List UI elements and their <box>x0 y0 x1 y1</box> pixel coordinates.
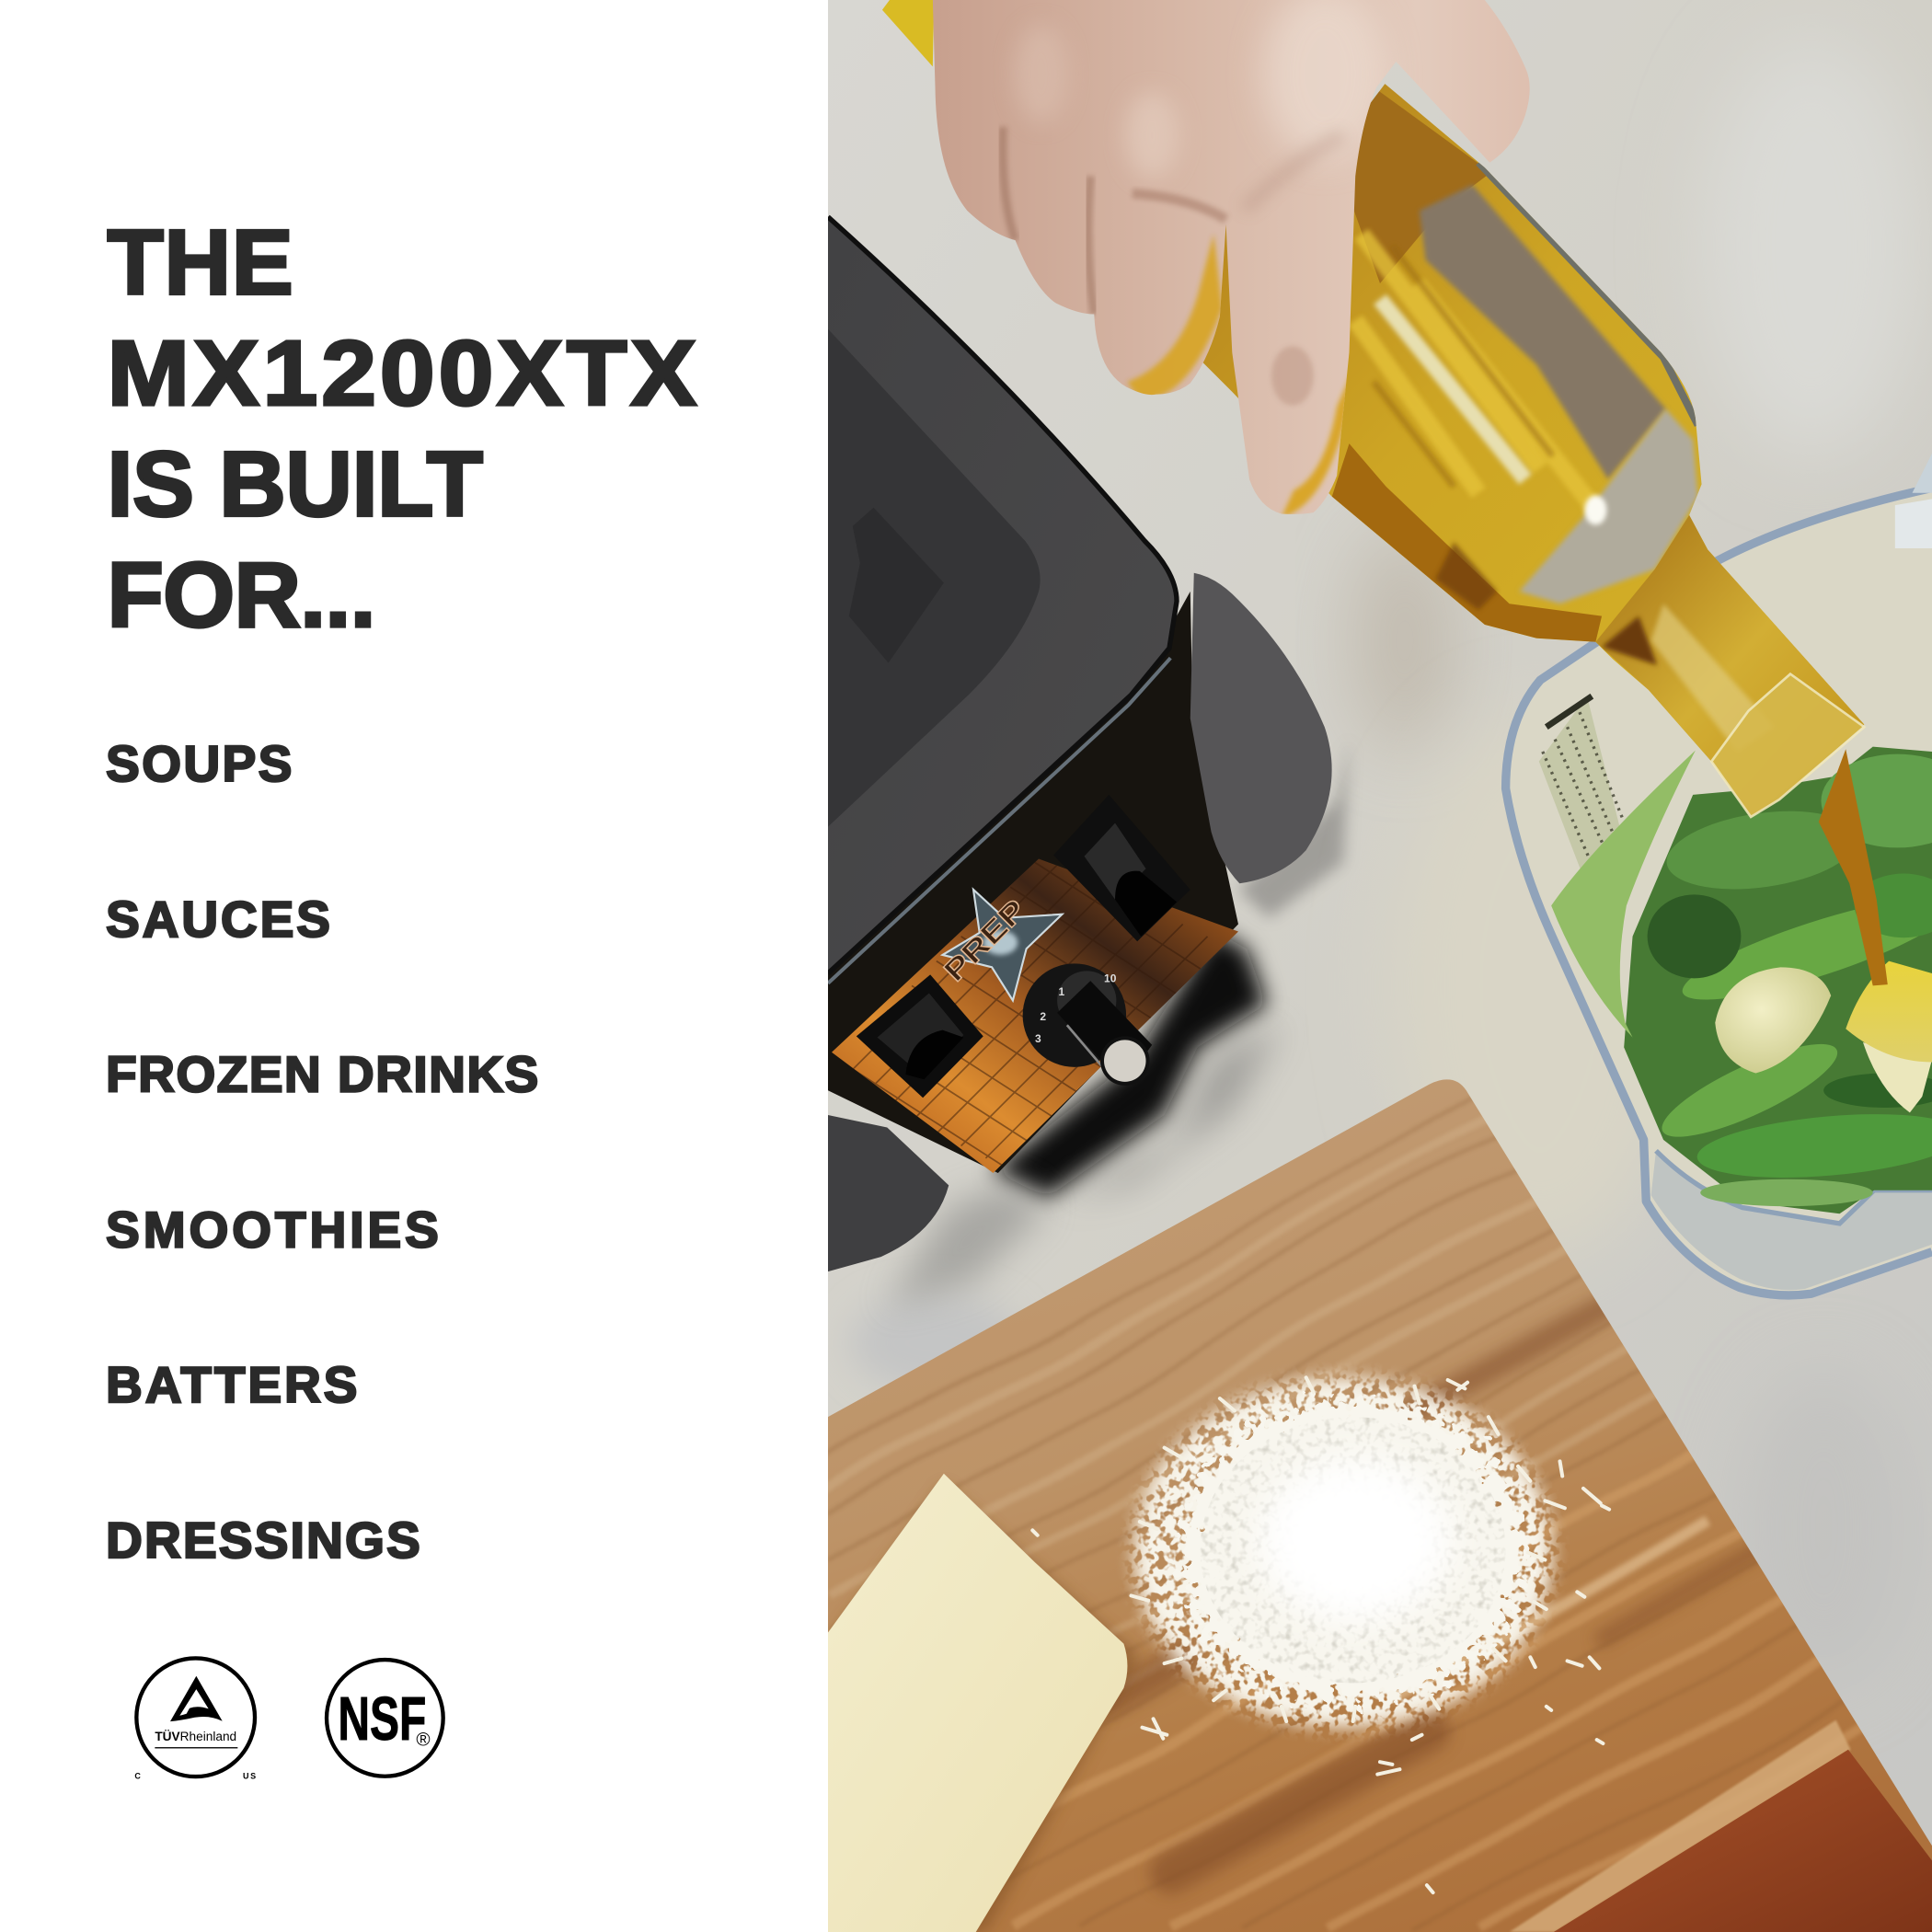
grated parmesan <box>1032 1377 1609 1892</box>
yellow streaks <box>1355 234 1602 517</box>
speed dial: 3 <box>1035 1032 1041 1045</box>
olive oil bottle <box>1196 74 1864 817</box>
left rubber foot <box>828 1115 949 1271</box>
item: dressings: DRESSINGS <box>106 1512 420 1569</box>
logo: TUV Rheinland <box>134 1658 258 1780</box>
blender jar <box>1506 454 1932 1295</box>
logo: X-PREP <box>937 890 1062 1001</box>
blender base <box>828 217 1332 1271</box>
silver shoulder <box>1519 409 1698 604</box>
jar lower clear wall <box>1651 1151 1932 1290</box>
left switch <box>857 974 983 1098</box>
logo: TUV Rheinland: US <box>243 1771 258 1780</box>
speed dial <box>1023 963 1152 1086</box>
cheese flecks <box>1032 1377 1609 1892</box>
basil leaves <box>1551 747 1932 1213</box>
title: FOR... <box>108 544 375 647</box>
wood tone bands <box>1109 1282 1775 1873</box>
right switch <box>1053 795 1190 941</box>
speed dial: 1 <box>1058 985 1064 998</box>
lid rim <box>828 217 1177 973</box>
lid edge highlight <box>828 658 1170 983</box>
garlic cloves <box>1715 961 1932 1112</box>
bottle cap <box>882 0 934 66</box>
item: sauces: SAUCES <box>106 891 330 948</box>
fingertip oil reflections <box>1282 370 1353 517</box>
glass edge <box>1478 163 1698 425</box>
wood grain <box>828 1097 1862 1932</box>
measurement scale <box>1539 696 1623 905</box>
item: batters: BATTERS <box>106 1356 357 1413</box>
jar rim <box>1506 488 1932 1295</box>
logo: NSF <box>327 1660 443 1777</box>
item: frozen drinks: FROZEN DRINKS <box>106 1046 538 1103</box>
lid <box>828 217 1177 973</box>
title: IS BUILT <box>108 432 483 535</box>
panel: white text column <box>0 0 828 1932</box>
lid handle <box>849 508 944 663</box>
logo: NSF: ® <box>416 1729 431 1750</box>
logo: NSF: NSF <box>338 1685 426 1754</box>
speed dial: 2 <box>1040 1010 1046 1023</box>
housing <box>828 592 1238 1173</box>
control panel <box>832 795 1238 1173</box>
right rubber foot <box>1190 573 1332 883</box>
brown glass upper <box>1350 74 1491 283</box>
oil stream <box>1819 749 1888 985</box>
lid recess <box>828 329 1041 827</box>
cutting board <box>828 1079 1932 1932</box>
grey reflection <box>1420 185 1666 479</box>
shadow under blender <box>887 740 1350 1306</box>
logo: TUV Rheinland: C <box>134 1771 141 1780</box>
logo: X-PREP: PREP <box>937 893 1032 988</box>
item: smoothies: SMOOTHIES <box>106 1201 439 1258</box>
certification logos <box>134 1658 443 1780</box>
logo: TUV Rheinland: TÜVRheinland <box>155 1730 236 1743</box>
skin tones <box>1263 0 1386 160</box>
title <box>108 211 696 647</box>
list of uses <box>106 735 538 1569</box>
item: soups: SOUPS <box>106 735 292 792</box>
amber lower edge <box>1332 443 1602 642</box>
title: MX1200XTX <box>108 322 696 425</box>
photo: blender, oil, basil and parmesan <box>828 0 1932 1932</box>
bottle mouth <box>1711 674 1864 817</box>
dark end of board <box>1510 1720 1851 1932</box>
speed dial: 10 <box>1104 972 1117 984</box>
counter surface <box>828 0 1932 1932</box>
neck <box>1595 515 1864 817</box>
cheese block <box>828 1474 1140 1932</box>
title: THE <box>108 211 293 314</box>
hand <box>924 0 1540 518</box>
jar handle clip <box>1895 499 1932 548</box>
